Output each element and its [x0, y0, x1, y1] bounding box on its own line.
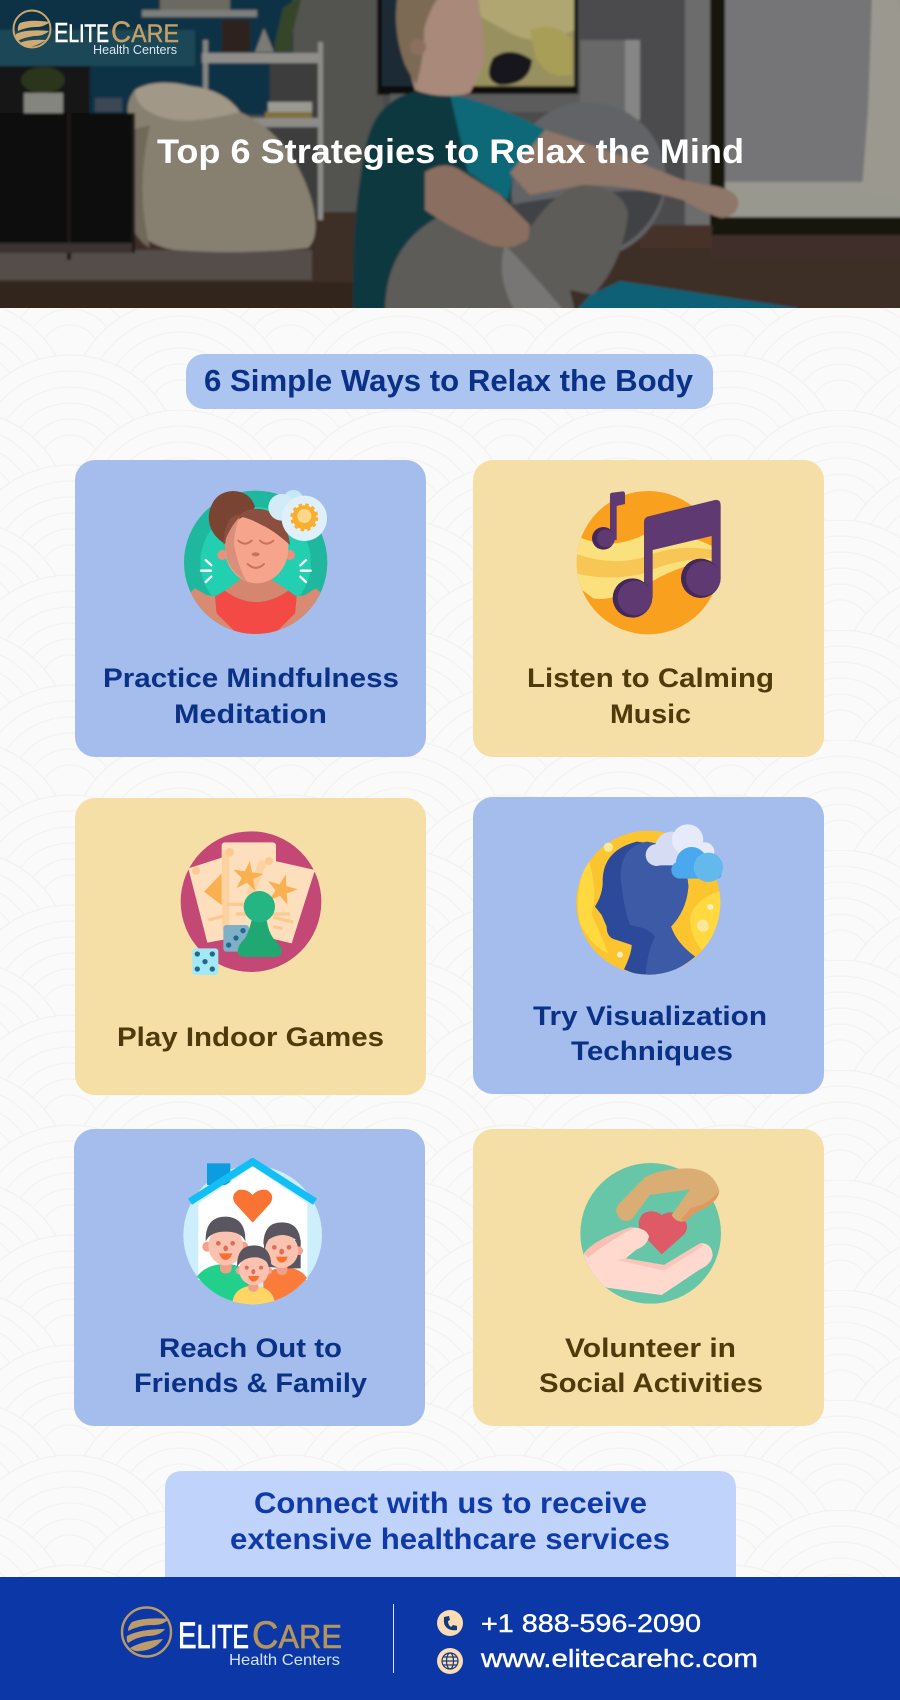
- footer band: [0, 1577, 900, 1700]
- label: listen to calming music: Listen to Calming: [527, 663, 774, 693]
- icon: globe: [437, 1648, 463, 1674]
- panel: volunteer in social activities: [473, 1129, 824, 1426]
- logo: Elite Care Health Centers footer: CARE: [252, 1614, 342, 1657]
- section heading pill: 6 Simple Ways to Relax the Body: [204, 363, 694, 398]
- label: volunteer in social activities: Volunteer in: [565, 1333, 736, 1363]
- section heading pill: [186, 354, 713, 409]
- label: try visualization techniques: Try Visualization: [533, 1001, 767, 1031]
- panel: listen to calming music: [473, 460, 824, 757]
- logo: Elite Care Health Centers header: ELITE: [54, 17, 109, 48]
- icon: phone: [437, 1610, 463, 1636]
- label: play indoor games: Play Indoor Games: [117, 1022, 384, 1052]
- label: practice mindfulness meditation: Practice Mindfulness: [103, 663, 399, 693]
- panel: reach out to friends and family: [74, 1129, 425, 1426]
- hero photo: woman meditating in a living room: [0, 0, 900, 313]
- icon: hands holding a heart: [580, 1163, 721, 1304]
- logo: Elite Care Health Centers footer: ELITE: [178, 1615, 249, 1656]
- icon: head silhouette with clouds: [576, 824, 723, 977]
- label line 2: Music: [610, 699, 691, 729]
- label line 2: Social Activities: [539, 1368, 763, 1398]
- callout: connect with us: [165, 1471, 736, 1578]
- panel: play indoor games: [75, 798, 426, 1095]
- label: reach out to friends and family: Reach Out to: [159, 1333, 342, 1363]
- icon: cards, dice and pawn: [181, 831, 321, 975]
- phone number: +1 888-596-2090: [481, 1610, 701, 1638]
- website: www.elitecarehc.com: [480, 1645, 758, 1673]
- icon: meditating woman: [184, 490, 327, 635]
- logo: Elite Care Health Centers footer: Health Centers: [229, 1652, 340, 1669]
- callout: connect with us: Connect with us to receive: [254, 1487, 647, 1520]
- icon: music notes: [573, 491, 721, 634]
- label line 2: Meditation: [174, 699, 327, 729]
- callout: connect with us: extensive healthcare services: [230, 1523, 670, 1556]
- logo: Elite Care Health Centers header: [14, 10, 179, 57]
- panel: try visualization techniques: [473, 797, 824, 1094]
- icon: family in a house: [183, 1162, 322, 1307]
- panel: practice mindfulness meditation: [75, 460, 426, 757]
- textured page background: [0, 300, 900, 1590]
- hero title: Top 6 Strategies to Relax the Mind: [157, 133, 744, 171]
- logo: Elite Care Health Centers footer: [122, 1608, 342, 1669]
- label line 2: Friends & Family: [134, 1368, 367, 1398]
- logo: Elite Care Health Centers header: Health Centers: [93, 42, 177, 57]
- logo: Elite Care Health Centers header: CARE: [111, 16, 179, 49]
- label line 2: Techniques: [571, 1036, 733, 1066]
